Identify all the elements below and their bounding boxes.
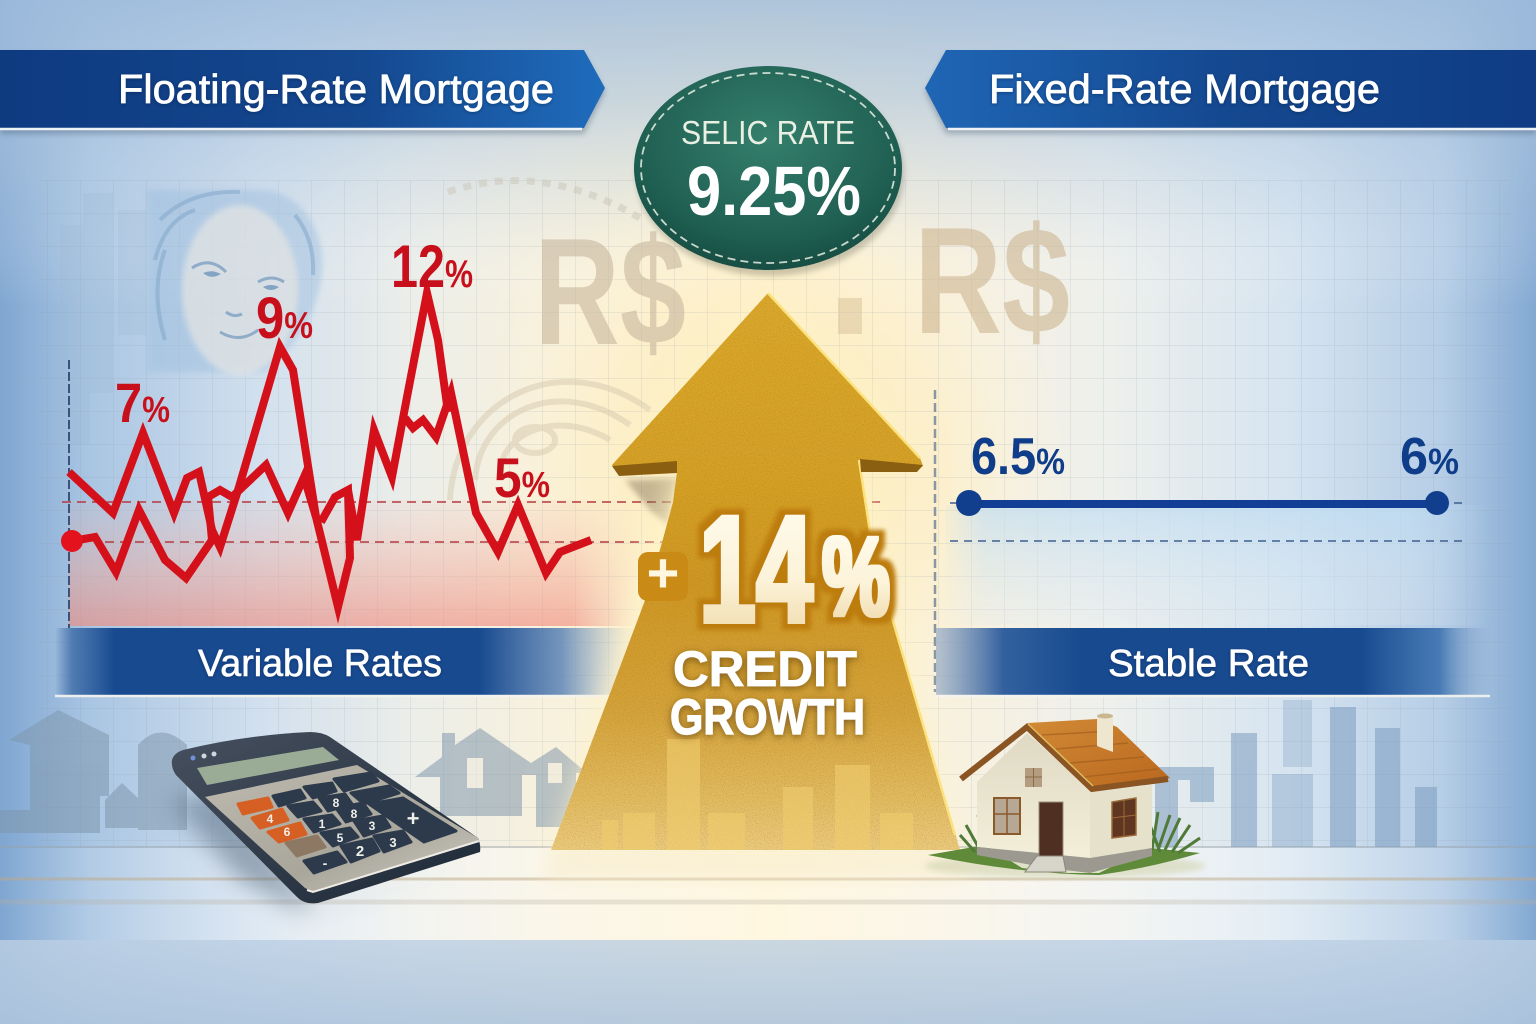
faded houses left [0, 710, 587, 833]
label 9%: 9% [256, 286, 313, 351]
percent sign: % [822, 514, 890, 639]
variable rate lines [69, 293, 591, 607]
arrow edge highlight [768, 293, 955, 835]
faded R$ symbol left: R$ [534, 207, 686, 377]
faded square mark [838, 298, 862, 334]
end dot [1425, 491, 1449, 515]
arrow shadow [625, 478, 677, 525]
faint bars inside arrow [602, 739, 913, 850]
label 7%: 7% [115, 371, 170, 434]
right window [1112, 798, 1136, 838]
wing undersides [612, 459, 923, 476]
faded bar skyline right [1155, 700, 1437, 847]
roof [1028, 719, 1170, 790]
steps [1025, 856, 1066, 872]
roof edge [961, 727, 1168, 789]
credit label: CREDIT [673, 641, 857, 697]
calculator shadow [170, 790, 480, 910]
attic window [1025, 768, 1042, 787]
display [197, 747, 339, 785]
left window [994, 798, 1020, 834]
sub-banner: variable rates: Variable Rates [198, 643, 442, 685]
selic label: SELIC RATE [681, 114, 855, 151]
faded banknote portrait [147, 190, 322, 375]
key labels [267, 796, 419, 871]
sub-banner: variable rates [55, 628, 645, 696]
grass [928, 808, 1200, 875]
banner: floating-rate mortgage [0, 50, 605, 134]
reference dashed lines [62, 502, 880, 542]
key labels: 2 [356, 843, 364, 860]
roof shingles [1042, 731, 1158, 777]
icon: house [925, 714, 1205, 878]
label 6.5%: 6.5% [971, 428, 1065, 486]
chart axis [934, 390, 936, 692]
arrow reflection [545, 848, 970, 880]
calculator face [205, 765, 479, 892]
key labels: 3 [389, 835, 397, 850]
reference dashed lines [950, 503, 1465, 541]
front wall [977, 733, 1090, 858]
panel: floating-rate chart [61, 233, 880, 628]
banner: fixed-rate mortgage [925, 50, 1536, 134]
panel: fixed-rate chart [935, 390, 1490, 692]
faded banknote medallion [448, 181, 650, 500]
growth label: GROWTH [670, 689, 865, 745]
label 6%: 6% [1400, 428, 1459, 486]
ground shadow [925, 854, 1205, 878]
arrow glow [555, 293, 957, 850]
key labels: 6 [284, 825, 291, 839]
faded bars behind portrait [60, 193, 146, 445]
banner: fixed-rate mortgage: Fixed-Rate Mortgage [989, 66, 1380, 112]
indicator lights [190, 752, 216, 760]
sub-banner: stable rate [936, 628, 1496, 696]
key labels: 4 [267, 812, 274, 826]
chart axis [68, 360, 70, 628]
key labels: 3 [369, 819, 376, 833]
faded R$ symbol right: R$ [914, 196, 1070, 366]
key labels: + [407, 806, 419, 831]
red area under chart [69, 500, 639, 626]
label 5%: 5% [494, 446, 550, 509]
arrow shape [551, 293, 960, 850]
sub-banner: stable rate: Stable Rate [1108, 643, 1309, 685]
credit growth arrow [545, 293, 970, 880]
blue area under line [945, 505, 1490, 625]
plus badge [638, 541, 688, 604]
start dot [61, 530, 83, 552]
banner: floating-rate mortgage: Floating-Rate Mortgage [118, 66, 554, 112]
key labels: 5 [337, 831, 344, 845]
plus badge: + [647, 541, 679, 604]
stone base [977, 847, 1152, 873]
start dot [956, 490, 982, 516]
keys [238, 773, 456, 873]
key labels: - [323, 855, 328, 871]
side wall [1090, 785, 1152, 860]
icon: calculator [170, 732, 480, 910]
chimney [1097, 714, 1113, 752]
key labels: 8 [333, 796, 340, 810]
stable rate line [969, 500, 1437, 508]
selic value: 9.25% [687, 152, 861, 230]
calculator body [172, 732, 480, 903]
key labels: 8 [351, 807, 358, 821]
door [1039, 802, 1063, 856]
key labels: 1 [319, 817, 326, 831]
value 14: 14 [699, 484, 813, 655]
selic rate badge [634, 66, 904, 276]
roof ridge highlight [1028, 724, 1093, 786]
label 12%: 12% [391, 233, 473, 300]
